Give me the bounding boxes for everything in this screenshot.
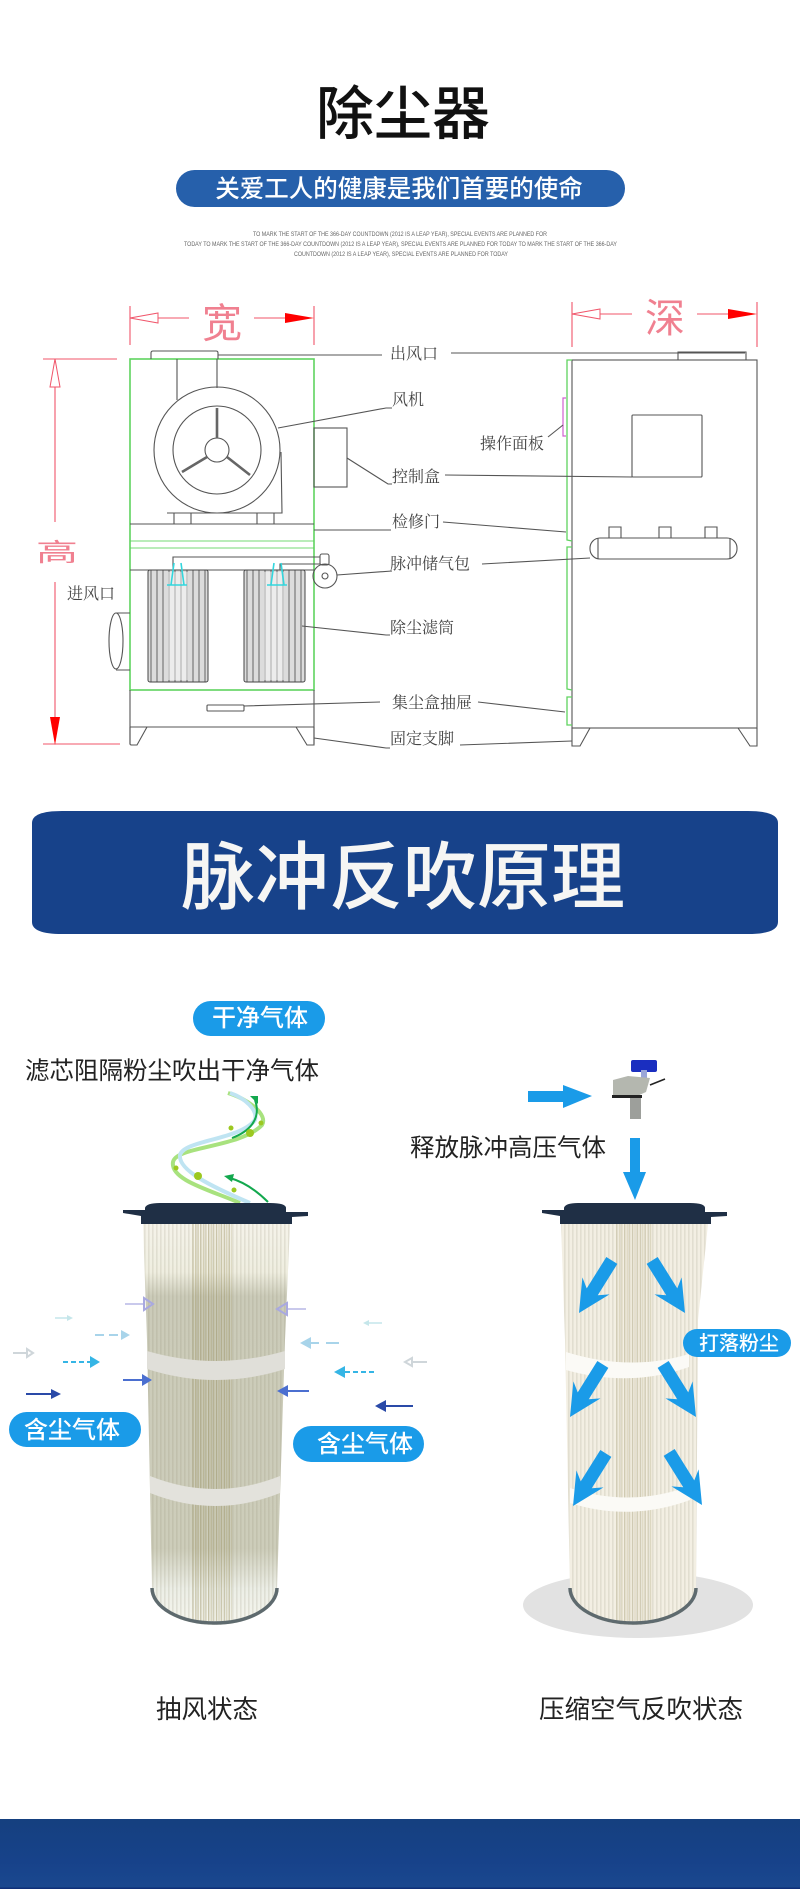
feet xyxy=(130,727,314,745)
leader lines xyxy=(218,353,745,748)
part labels: 脉冲储气包 xyxy=(390,555,470,573)
part labels: 集尘盒抽屉 xyxy=(392,694,472,712)
height dimension xyxy=(36,359,120,745)
pill: dusty air left xyxy=(9,1412,141,1447)
panel: reverse blow state xyxy=(410,1060,791,1724)
arrow: air into valve xyxy=(528,1085,592,1108)
part labels xyxy=(67,345,544,748)
filter cartridge left xyxy=(123,1203,308,1625)
icon: fan xyxy=(154,387,282,524)
part labels: 操作面板 xyxy=(480,435,544,453)
subtitle pill xyxy=(176,170,625,207)
arrows: dusty air in xyxy=(13,1298,427,1412)
text: release pulse: 释放脉冲高压气体 xyxy=(410,1134,606,1162)
part labels: 出风口 xyxy=(390,345,438,363)
small english text: TODAY TO MARK THE START OF THE 366-DAY COUNTDOWN (2012 IS A LEAP YEAR), SPECIAL EVENTS ARE PLANNED FOR TODAY TO MARK THE START OF THE 366-DAY xyxy=(184,241,618,248)
depth dimension: 深 xyxy=(645,297,685,341)
control box xyxy=(314,428,347,487)
width dimension xyxy=(130,302,314,346)
air tank circle xyxy=(313,564,337,588)
arrows: blown out xyxy=(556,1252,716,1514)
icon: clean air swirl xyxy=(173,1093,268,1203)
small english text: TO MARK THE START OF THE 366-DAY COUNTDOWN (2012 IS A LEAP YEAR), SPECIAL EVENTS ARE PLANNED FOR xyxy=(253,231,547,238)
depth dimension xyxy=(572,297,757,347)
pill: dusty air right xyxy=(293,1426,424,1462)
pill: dusty air left: 含尘气体 xyxy=(24,1417,120,1444)
panel: suction state xyxy=(9,1001,427,1724)
side view xyxy=(563,352,757,746)
small english text xyxy=(184,231,618,258)
small english text: COUNTDOWN (2012 IS A LEAP YEAR), SPECIAL EVENTS ARE PLANNED FOR TODAY xyxy=(294,251,509,258)
top cap xyxy=(123,1203,308,1224)
part labels: 控制盒 xyxy=(392,468,440,486)
pill: dust falls: 打落粉尘 xyxy=(699,1332,779,1355)
height dimension: 高 xyxy=(36,539,78,567)
caption: 抽风状态 xyxy=(156,1696,258,1724)
pill: dust falls xyxy=(683,1329,791,1357)
front view xyxy=(109,351,347,745)
inlet xyxy=(109,613,130,670)
filter cartridge right xyxy=(542,1203,727,1625)
width dimension: 宽 xyxy=(202,302,242,346)
drawer handle xyxy=(207,705,244,711)
text: filter description: 滤芯阻隔粉尘吹出干净气体 xyxy=(25,1057,319,1085)
subtitle pill: 关爱工人的健康是我们首要的使命 xyxy=(215,175,583,203)
title: 除尘器 xyxy=(316,82,490,147)
part labels: 除尘滤筒 xyxy=(390,619,454,637)
shadow ellipse xyxy=(523,1572,753,1638)
part labels: 风机 xyxy=(392,391,424,409)
pill: dusty air right: 含尘气体 xyxy=(317,1431,413,1458)
banner xyxy=(32,811,778,934)
cyan nozzles xyxy=(167,563,287,585)
arrow: down xyxy=(623,1138,646,1200)
caption: 压缩空气反吹状态 xyxy=(539,1696,743,1724)
footer band xyxy=(0,1819,800,1889)
part labels: 进风口 xyxy=(67,585,115,603)
pill: clean gas: 干净气体 xyxy=(212,1005,308,1032)
filter cartridges xyxy=(148,554,329,682)
straps xyxy=(147,1351,285,1380)
icon: pulse valve xyxy=(612,1060,665,1119)
part labels: 固定支脚 xyxy=(390,730,454,748)
part labels: 检修门 xyxy=(392,513,440,531)
pill: clean gas xyxy=(193,1001,325,1036)
banner: 脉冲反吹原理 xyxy=(181,836,625,919)
panel: structure diagram xyxy=(36,297,757,748)
